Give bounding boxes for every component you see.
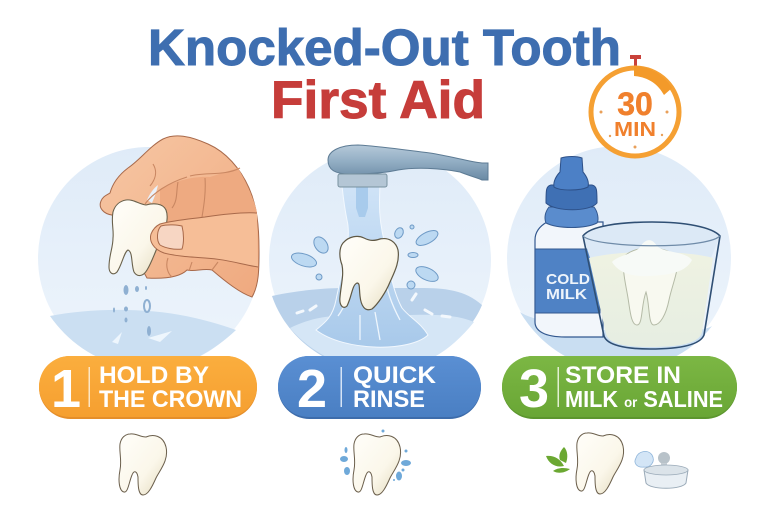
step label: STORE IN [565, 362, 681, 389]
title [148, 19, 621, 130]
stopwatch: 30 min: MIN [614, 119, 656, 141]
icon: bottle: MILK [546, 286, 587, 303]
milk [589, 252, 713, 347]
bottle body [535, 222, 603, 337]
icon: small tooth with leaves and bowl [546, 433, 688, 494]
water stream [316, 186, 428, 347]
hand shaded folds [160, 168, 257, 224]
stopwatch crown [630, 55, 641, 67]
step 2 pill: RINSE [353, 386, 425, 413]
bottle nozzle [554, 156, 588, 190]
hand creases [145, 164, 240, 277]
small drops [340, 430, 411, 481]
step 1 pill [39, 356, 257, 419]
bottle collar [545, 207, 598, 228]
water pool [50, 310, 236, 369]
leaves [546, 447, 570, 473]
bottle label [535, 249, 600, 313]
step 1 pill: THE CROWN [99, 386, 242, 413]
table shadow [520, 312, 712, 370]
bottle cap [546, 185, 597, 210]
icon: small tooth 1 [119, 434, 167, 495]
water streaks [338, 270, 400, 340]
stopwatch: 30 min [591, 55, 679, 156]
step label: QUICK [353, 362, 437, 389]
step 3 pill [502, 356, 737, 419]
illustration background [269, 149, 491, 371]
title line 2: First Aid [271, 71, 485, 130]
icon: small tooth with drops [340, 430, 411, 495]
panel: store in milk or saline [507, 146, 731, 370]
step 3 pill: MILK or SALINE [565, 386, 723, 412]
water drips [113, 285, 151, 336]
step 2 pill [278, 356, 481, 419]
glass rim and walls [583, 222, 720, 349]
step number: 1 [51, 359, 81, 419]
splash highlights [112, 331, 172, 344]
step number: 3 [519, 359, 549, 419]
milk foam [612, 240, 692, 276]
icon: hand [100, 136, 259, 297]
step label: HOLD BY [99, 362, 209, 389]
water pool highlight [290, 315, 474, 371]
icon: tooth rinsed [340, 236, 398, 310]
bottle label text: COLD [546, 271, 590, 288]
faucet collar [338, 174, 387, 187]
sink highlights [297, 294, 450, 317]
icon: tooth held [109, 200, 167, 276]
bowl with foam [635, 451, 688, 488]
stopwatch elapsed arc [634, 66, 672, 95]
gap between fingers [147, 185, 158, 203]
panel: quick rinse [269, 145, 491, 371]
thumb nail [157, 225, 184, 249]
thumb outline [151, 213, 258, 267]
thumb [151, 213, 258, 267]
icon: faucet [328, 145, 488, 180]
title line 1: Knocked-Out Tooth [148, 19, 621, 76]
step number: 2 [297, 359, 327, 419]
stopwatch ticks [600, 110, 668, 148]
water drops [290, 225, 440, 289]
glass interior [583, 222, 720, 258]
tooth in glass [623, 248, 678, 325]
stream inner [356, 187, 368, 217]
panel: hold by the crown [38, 136, 260, 369]
stopwatch text: 30 [617, 86, 653, 122]
icon: glass of milk [583, 222, 720, 349]
icon: bottle [535, 156, 603, 337]
sink water [272, 288, 482, 371]
illustration background [507, 146, 731, 370]
glass rim front [583, 236, 720, 246]
illustration background [38, 147, 260, 369]
stopwatch dial [591, 68, 679, 156]
